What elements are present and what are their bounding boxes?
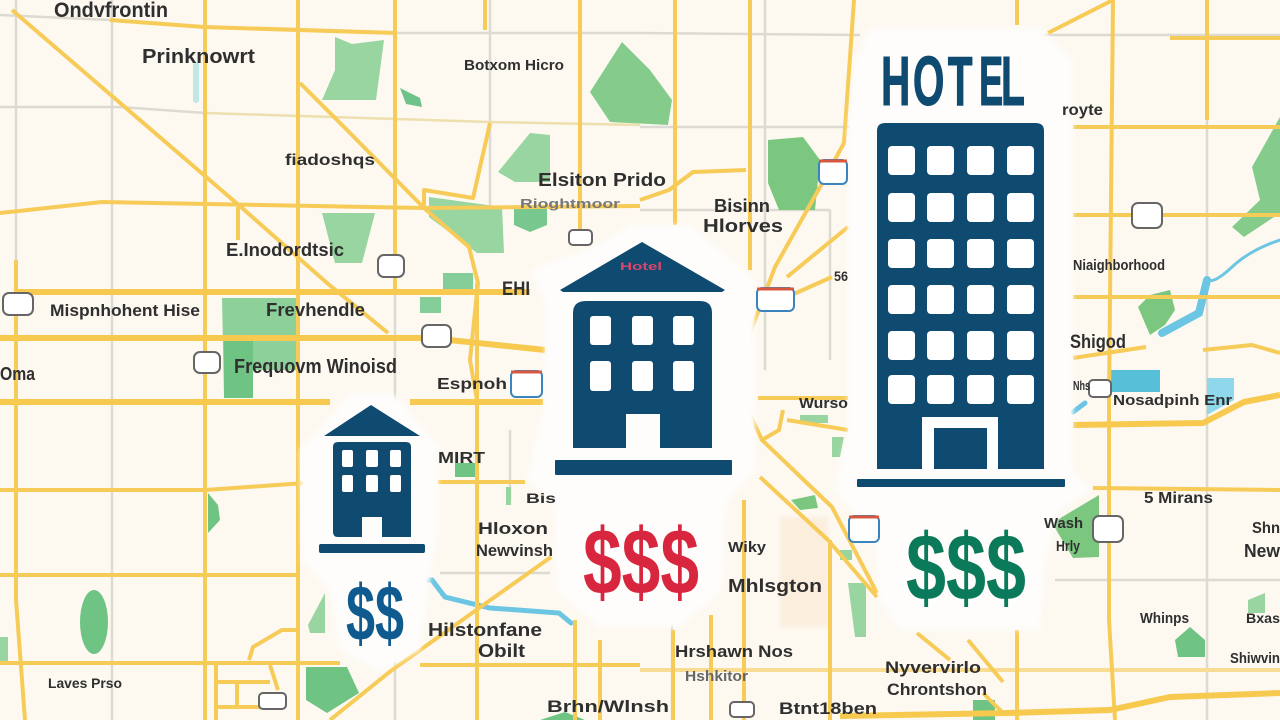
map labels: royte <box>1062 102 1103 119</box>
map labels: Niaighborhood <box>1073 257 1165 274</box>
map labels: New <box>1244 541 1280 561</box>
map labels: Rioghtmoor <box>520 196 620 211</box>
map labels: Wurso <box>799 395 848 412</box>
map labels: Frevhendle <box>266 300 365 320</box>
grey highway shields <box>3 203 1162 717</box>
map labels: Bxas <box>1246 610 1280 626</box>
hotel heading <box>881 42 1025 121</box>
map labels: Hloxon <box>478 519 548 538</box>
map labels: 56 <box>834 268 848 284</box>
map labels: MIRT <box>438 450 485 467</box>
hotel heading: L <box>1001 43 1025 121</box>
map labels: fiadoshqs <box>285 152 375 169</box>
map labels: Obilt <box>478 641 525 661</box>
map labels: Newvinsh <box>476 541 553 560</box>
small hotel icon <box>319 405 425 553</box>
map labels: Espnoh <box>437 376 507 393</box>
large price: three dollars: $$$ <box>906 515 1026 621</box>
map labels: Frequovm Winoisd <box>234 356 397 378</box>
map labels: Nhs <box>1073 378 1090 393</box>
white halo: small hotel <box>300 393 438 672</box>
map labels: Elsiton Prido <box>538 170 666 190</box>
map labels: Nosadpinh Enr <box>1113 392 1232 409</box>
map labels: Hrshawn Nos <box>675 642 793 661</box>
map labels: Hshkitor <box>685 668 748 685</box>
medium hotel icon <box>555 242 732 475</box>
map labels: E.Inodordtsic <box>226 240 344 260</box>
medium hotel sign: Hotel <box>620 261 662 273</box>
hotel heading: E <box>979 42 1003 120</box>
map labels: Mispnhohent Hise <box>50 301 200 320</box>
map labels: EHI <box>502 279 530 300</box>
large hotel icon <box>857 123 1065 487</box>
map labels: Chrontshon <box>887 680 987 699</box>
map labels: Nyvervirlo <box>885 658 981 677</box>
map water <box>196 65 1280 623</box>
white halo: medium hotel <box>527 225 755 627</box>
map labels: Whinps <box>1140 610 1189 627</box>
map labels: Mhlsgton <box>728 576 822 596</box>
major roads <box>0 292 1280 716</box>
map labels: Shigod <box>1070 332 1126 353</box>
map labels: Prinknowrt <box>142 46 255 68</box>
map labels: Botxom Hicro <box>464 57 564 74</box>
map labels: 5 Mirans <box>1144 490 1213 507</box>
small price: two dollars: $$ <box>346 568 404 657</box>
map labels: Hilstonfane <box>428 620 542 640</box>
map labels: Wiky <box>728 539 767 556</box>
medium price: three dollars: $$$ <box>583 509 699 614</box>
map labels: Btnt18ben <box>779 699 877 718</box>
white halo: large hotel <box>835 28 1090 630</box>
map labels: Brhn/Wlnsh <box>547 697 669 716</box>
coloured and foreground shields <box>511 160 1123 542</box>
map labels: Hlorves <box>703 216 783 236</box>
map labels: Hrly <box>1056 538 1081 555</box>
map labels: Wash <box>1044 515 1083 532</box>
map labels: Bis <box>526 490 556 506</box>
map labels: Laves Prso <box>48 675 122 691</box>
map labels: Oma <box>0 364 36 384</box>
map labels: Bisinn <box>714 196 770 216</box>
hotel heading: HOT <box>881 43 973 121</box>
